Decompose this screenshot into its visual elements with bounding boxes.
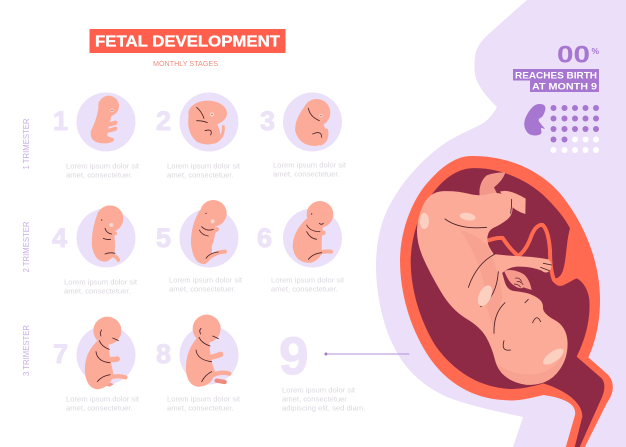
stage 4 xyxy=(52,205,138,296)
stage 9: amet, consectetuer xyxy=(282,394,347,404)
stage 8: amet, consectetuer. xyxy=(167,404,234,412)
fetus shin xyxy=(479,173,505,200)
title banner: FETAL DEVELOPMENT xyxy=(95,34,281,50)
stage 4: amet, consectetuer. xyxy=(64,286,131,296)
statistic xyxy=(513,42,600,92)
stage 3 xyxy=(260,92,347,178)
stage 2 xyxy=(156,92,241,180)
subtitle: MONTHLY STAGES xyxy=(153,59,218,68)
statistic: AT MONTH 9 xyxy=(532,82,597,92)
stage 2: 2 xyxy=(156,106,171,136)
icon: fetus silhouette xyxy=(524,104,545,136)
umbilical cord xyxy=(483,225,563,284)
stage 6: amet, consectetuer. xyxy=(271,284,338,294)
stage 2: amet, consectetuer. xyxy=(167,170,234,180)
statistic: 00 xyxy=(557,42,590,68)
stage 5: amet, consectetuer. xyxy=(169,284,236,294)
stage 4: Lorem ipsum dolor sit xyxy=(64,278,138,286)
pregnant body silhouette background xyxy=(376,0,626,447)
uterus with fetus xyxy=(400,156,613,447)
fetus hand near mouth xyxy=(504,270,532,290)
stage 1: 1 xyxy=(53,106,68,136)
trimester label 1: 1 TRIMESTER xyxy=(22,118,31,170)
stage 3: amet, consectetuer. xyxy=(273,170,340,178)
stage 1: Lorem ipsum dolor sit xyxy=(66,162,140,170)
stage 1: amet, consectetuer. xyxy=(66,170,133,180)
fetus skin creases xyxy=(445,199,552,350)
fetus skin highlights xyxy=(420,212,566,368)
stage 9: adipiscing elit, sed diam. xyxy=(282,404,365,412)
fetus foot xyxy=(500,191,526,214)
stage 7: amet, consectetuer. xyxy=(66,404,133,412)
stage 9: 9 xyxy=(279,327,308,386)
head shading xyxy=(497,350,565,385)
title banner xyxy=(90,29,286,53)
stage 8 xyxy=(156,315,241,412)
stage 3: 3 xyxy=(260,106,275,136)
uterus cavity xyxy=(411,168,604,447)
stage 7 xyxy=(53,317,140,412)
stage 5: 5 xyxy=(156,223,171,253)
dot chart: 9 out of 10 style pictogram xyxy=(550,105,599,153)
stage 8: Lorem ipsum dolor sit xyxy=(167,394,241,404)
stage 4: 4 xyxy=(52,223,67,253)
stage 1 xyxy=(53,92,140,180)
stage 9 xyxy=(279,327,410,412)
stage 6: Lorem ipsum dolor sit xyxy=(271,276,345,284)
fetus body and head xyxy=(417,191,568,385)
stage 9: Lorem ipsum dolor sit xyxy=(282,386,356,394)
uterus wall xyxy=(400,156,613,447)
stage 8: 8 xyxy=(156,339,171,369)
trimester label 2: 2 TRIMESTER xyxy=(22,221,31,272)
stage 7: 7 xyxy=(53,339,68,369)
fetus arm xyxy=(493,254,552,273)
trimester label 3: 3 TRIMESTER xyxy=(22,325,31,376)
stage 6: 6 xyxy=(257,223,272,253)
statistic: REACHES BIRTH xyxy=(515,70,597,80)
stage 5: Lorem ipsum dolor sit xyxy=(169,276,243,284)
stage 3: Lorem ipsum dolor sit xyxy=(273,160,347,170)
stage 5 xyxy=(156,200,243,294)
stage 2: Lorem ipsum dolor sit xyxy=(167,162,241,170)
fetus shading xyxy=(460,230,503,337)
statistic: % xyxy=(592,46,600,56)
stage 6 xyxy=(257,201,345,294)
stage 7: Lorem ipsum dolor sit xyxy=(66,394,140,404)
